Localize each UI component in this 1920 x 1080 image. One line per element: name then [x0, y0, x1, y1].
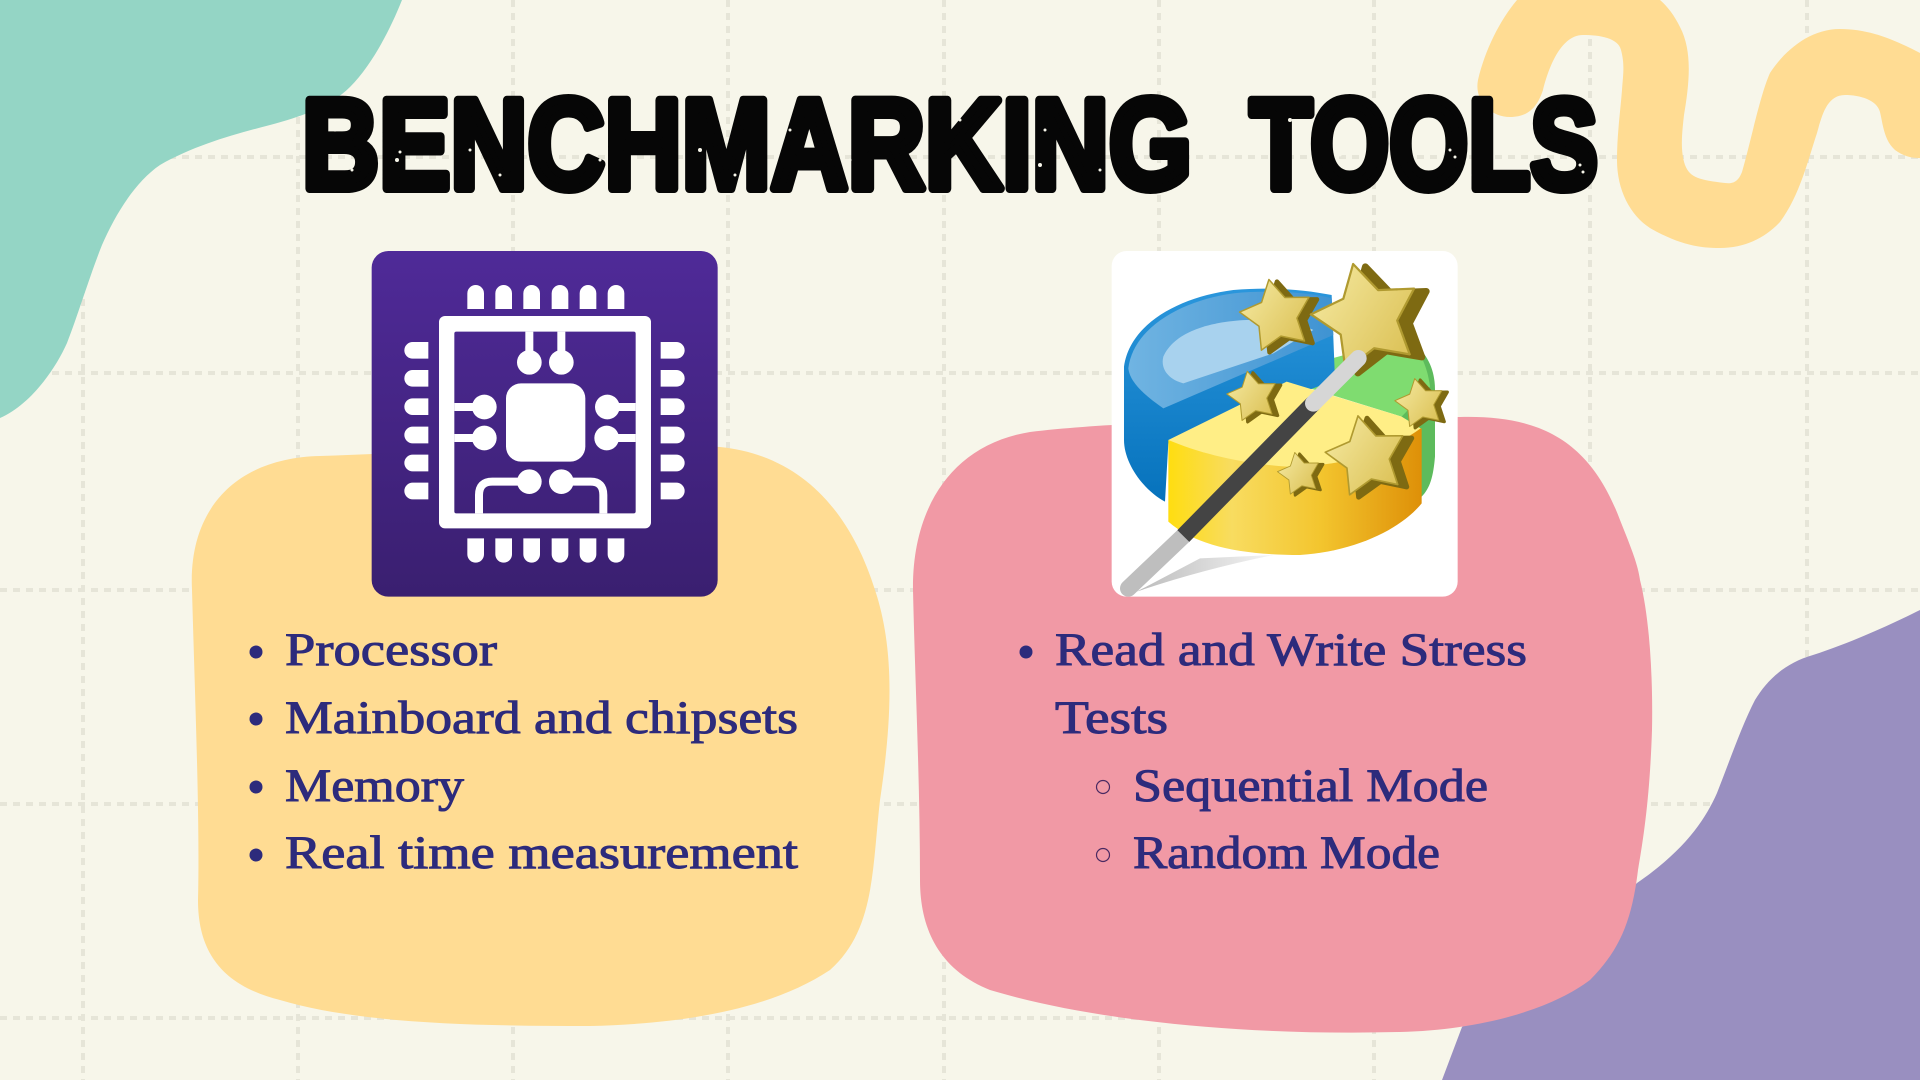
- bullet list: CPU-Z features: Real time measurement: [285, 827, 798, 879]
- title: TOOLS: [1250, 74, 1598, 216]
- bullet list: stress tests: Read and Write Stress: [1055, 624, 1527, 676]
- panel: yellow blob: [192, 445, 890, 1026]
- title: BENCHMARKING: [302, 74, 1192, 216]
- yellow squiggle: [1477, 0, 1920, 248]
- teal corner blob: [0, 0, 402, 418]
- bullet list: stress tests: [1020, 624, 1527, 879]
- bullet list: stress tests: Sequential Mode: [1133, 760, 1488, 812]
- bullet list: CPU-Z features: Memory: [285, 760, 465, 812]
- magic wand: [1128, 358, 1358, 588]
- bullet list: CPU-Z features: [250, 624, 798, 879]
- green slice: [1287, 338, 1435, 497]
- stars: [1223, 248, 1453, 502]
- icon: pie chart with magic wand: [1112, 248, 1458, 597]
- wand shadow: [1137, 555, 1273, 592]
- bullet list: stress tests: Random Mode: [1133, 827, 1440, 879]
- bullet list: stress tests: Tests: [1055, 692, 1168, 744]
- icon: CPU chip: [372, 251, 718, 597]
- yellow slice: [1168, 382, 1422, 555]
- purple corner blob: [1442, 610, 1920, 1080]
- blue slice: [1124, 289, 1335, 502]
- bullet list: CPU-Z features: Processor: [285, 624, 497, 676]
- bullet list: CPU-Z features: Mainboard and chipsets: [285, 692, 798, 744]
- panel: pink blob: [913, 417, 1652, 1033]
